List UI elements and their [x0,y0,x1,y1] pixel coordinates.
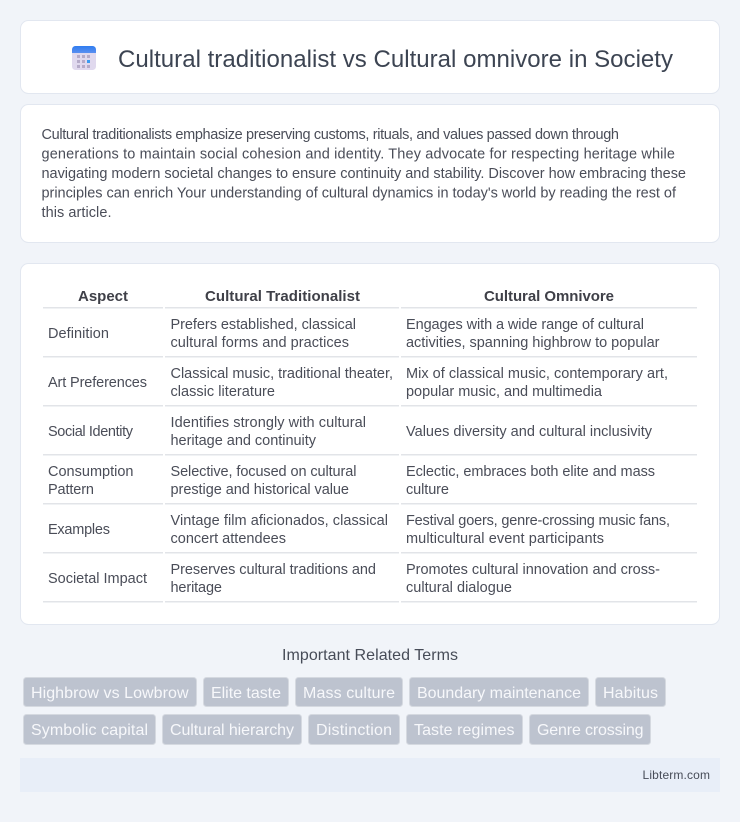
row: definition: Engages with a wide range of cultural [406,317,644,333]
row: consumption pattern: prestige and historical value [170,482,349,498]
intro text block: Cultural traditionalists emphasize preserving customs, rituals, and values passed down through [42,127,619,143]
row: examples: Festival goers, genre-crossing music fans, [406,513,670,529]
row: societal impact: Preserves cultural traditions and [170,562,376,578]
tags: related terms: Taste regimes [414,722,514,739]
row: examples: concert attendees [170,531,286,547]
row: social identity: heritage and continuity [170,433,317,449]
table header: Cultural Traditionalist [205,288,360,305]
row: definition: Definition [48,326,109,342]
intro text block: principles can enrich Your understanding of cultural dynamics in today's world by reading the rest of [42,186,677,202]
table header [78,288,614,305]
row: consumption pattern: Eclectic, embraces both elite and mass [406,464,655,480]
row: definition [48,317,660,351]
row: art preferences: Classical music, traditional theater, [170,366,393,382]
tags: related terms: Habitus [603,685,658,702]
row: examples: Examples [48,522,110,538]
panel: introduction [20,104,720,242]
row: societal impact: Promotes cultural innovation and cross- [406,562,660,578]
intro text block: this article. [42,205,112,221]
table header: Cultural Omnivore [484,288,614,305]
row: definition: cultural forms and practices [170,335,349,351]
row: art preferences: Art Preferences [48,375,147,391]
row: art preferences: classic literature [170,384,275,400]
tags: related terms: Elite taste [211,685,281,702]
row: social identity [48,415,653,449]
row: examples: Vintage film aficionados, classical [170,513,388,529]
row: social identity: Values diversity and cultural inclusivity [406,424,653,440]
row: art preferences [48,366,668,400]
icon: calendar [72,46,96,70]
row: art preferences: Mix of classical music, contemporary art, [406,366,668,382]
row: definition: activities, spanning highbrow to popular [406,335,660,351]
row: societal impact [48,562,660,596]
heading: important related terms: Important Related Terms [282,647,458,664]
row: examples: multicultural event participants [406,531,604,547]
panel: comparison table [20,264,720,624]
row: social identity: Identifies strongly with cultural [170,415,366,431]
intro text block: generations to maintain social cohesion and identity. They advocate for respecting heritage while [42,146,675,162]
row: societal impact: cultural dialogue [406,580,512,596]
tags: related terms [24,678,666,744]
tags: related terms: Cultural hierarchy [170,722,294,739]
tags: related terms: Distinction [316,722,392,739]
row: art preferences: popular music, and multimedia [406,384,603,400]
title: Cultural traditionalist vs Cultural omnivore in Society [118,46,673,73]
tags: related terms: Mass culture [303,685,395,702]
footer credit: Libterm.com [642,768,710,782]
intro text block [42,127,686,221]
row: consumption pattern: Consumption [48,464,134,480]
panel: title header [20,20,720,94]
row: consumption pattern: Selective, focused on cultural [170,464,356,480]
tags: related terms: Boundary maintenance [417,685,581,702]
row: examples [48,513,670,547]
tags: related terms: Highbrow vs Lowbrow [31,685,189,702]
row: consumption pattern [48,464,655,498]
tags: related terms: Genre crossing [537,722,644,739]
row: consumption pattern: Pattern [48,482,94,498]
table header: Aspect [78,288,128,305]
footer bar [20,758,720,792]
row: consumption pattern: culture [406,482,449,498]
tags: related terms: Symbolic capital [31,722,148,739]
row: definition: Prefers established, classical [170,317,356,333]
row: social identity: Social Identity [48,424,134,440]
row: societal impact: Societal Impact [48,571,147,587]
intro text block: navigating modern societal changes to ensure continuity and stability. Discover how embracing these [42,166,686,182]
row: societal impact: heritage [170,580,222,596]
